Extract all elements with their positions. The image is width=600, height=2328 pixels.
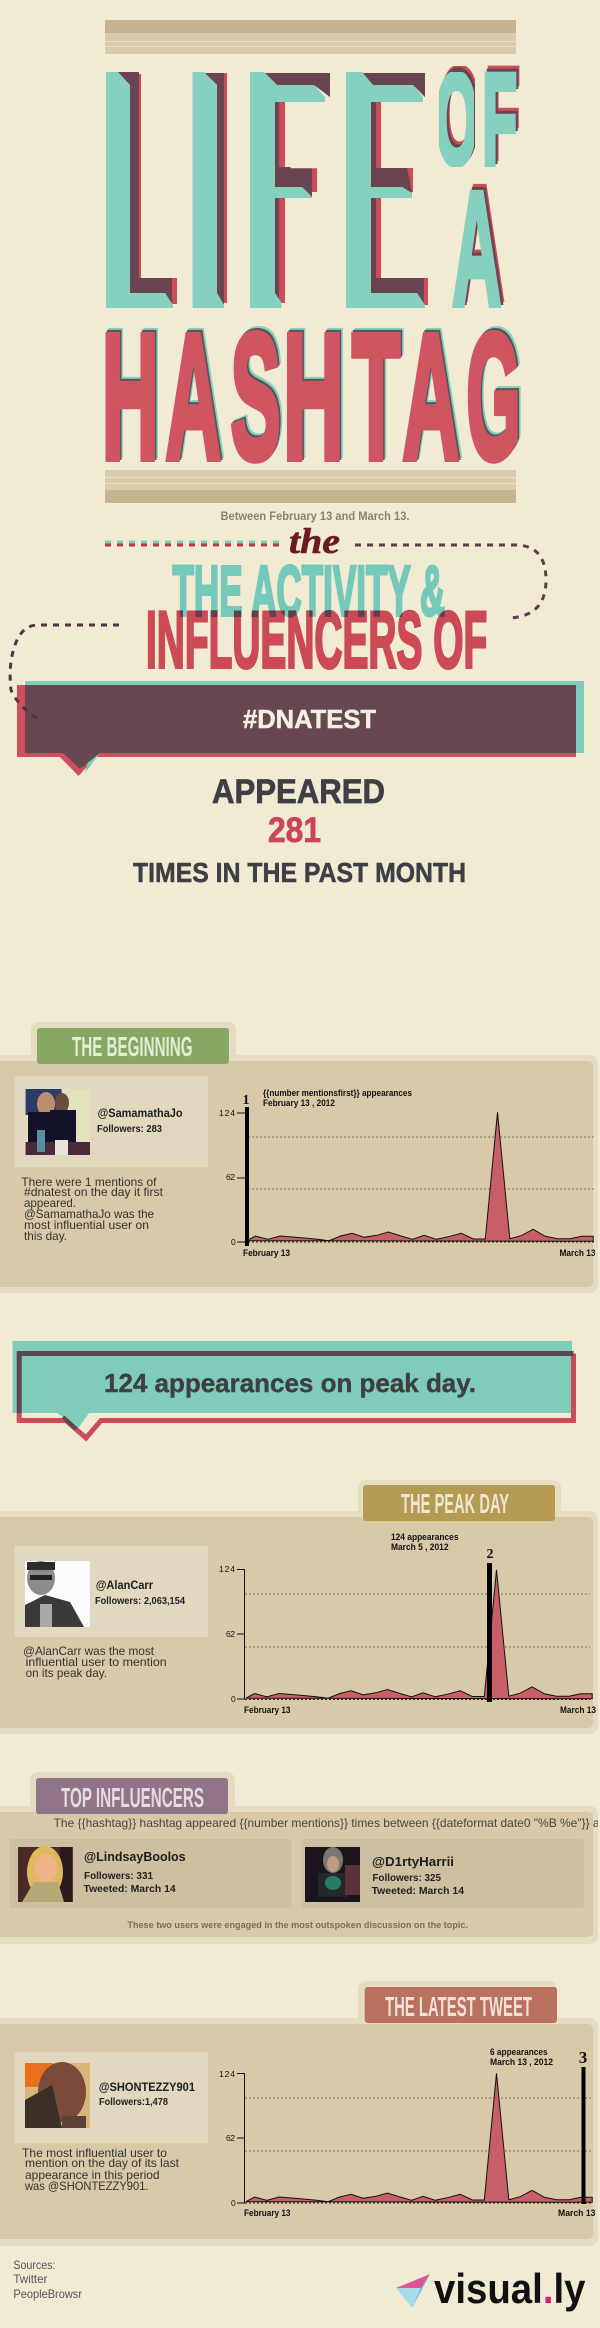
title word: LIFE: E [344,0,456,382]
chart: peak day: March 5 , 2012 [391,1542,448,1552]
user card: SamamathaJo: @SamamathaJo [98,1106,183,1120]
description: the beginning: most influential user on [24,1218,149,1232]
title word: HASHTAG: H [103,296,160,495]
title word: A: A [452,159,501,340]
description: the beginning: There were 1 mentions of [21,1175,157,1189]
title word: OF: O [438,42,481,187]
sources: Twitter [13,2272,47,2286]
tab: the beginning: THE BEGINNING [72,1031,192,1062]
photo: SHONTEZZY901 [25,2062,90,2128]
chart: latest tweet: February 13 [244,2208,290,2218]
panel: the peak day [0,1480,598,1734]
panel: top influencers [0,1772,600,1944]
title word: HASHTAG: A [166,297,221,497]
title word: HASHTAG: A [168,293,224,493]
chart: peak day: 124 [219,1564,235,1574]
chart: peak day: 0 [231,1694,236,1704]
overflowing template text: The {{hashtag}} hashtag appeared {{number mentions}} times between {{dateformat date0 "%B %e"}} a [54,1816,600,1830]
description: the latest tweet: The most influential user to [22,2146,167,2160]
panel: the latest tweet [0,1981,598,2246]
photo: SamamathaJo [26,1089,90,1155]
chart: first appearance: March 13 [560,1248,596,1258]
title word: HASHTAG: A [404,296,461,495]
title word: HASHTAG: H [102,298,159,497]
tab: top influencers: TOP INFLUENCERS [61,1782,204,1813]
headline stat [133,773,466,888]
dashed line: left [10,625,119,719]
top stripes [105,20,516,54]
panel: the beginning [0,1022,598,1293]
influencer card: LindsayBoolos: Tweeted: March 14 [84,1884,176,1895]
title: LIFE OF A HASHTAG [95,0,524,498]
title word: LIFE: I [181,0,228,382]
sources [13,2258,82,2301]
photo: AlanCarr [25,1561,90,1627]
user card: SHONTEZZY901 [14,2052,208,2143]
chart: first appearance [219,1088,596,1258]
title word: OF [439,66,520,167]
title word: HASHTAG: H [284,294,345,495]
chart: latest tweet: 6 appearances [490,2047,548,2057]
photo: D1rtyHarrii [305,1847,360,1902]
sources: PeopleBrowsr [13,2287,82,2301]
title word: LIFE: F [248,0,350,382]
chart: peak day: February 13 [244,1705,290,1715]
title word: A: A [455,153,504,334]
chart: first appearance: 124 [219,1108,235,1118]
heading: the activity and influencers of: THE ACTIVITY & [172,551,445,631]
title word: LIFE: F [239,0,341,382]
description: the beginning [21,1175,164,1243]
title word: OF: F [485,41,520,186]
user card: AlanCarr: @AlanCarr [96,1578,153,1592]
title word: HASHTAG: T [352,298,400,497]
callout text: 124 appearances on peak day. [104,1368,476,1398]
chart: first appearance: February 13 [243,1248,290,1258]
title word: OF: O [437,45,480,190]
title word: HASHTAG: H [283,296,344,497]
influencer card: D1rtyHarrii: Tweeted: March 14 [372,1886,464,1897]
description: the latest tweet: was @SHONTEZZY901. [24,2179,148,2193]
date range text: Between February 13 and March 13. [220,509,410,523]
title word: OF: F [484,44,519,189]
sources: Sources: [13,2258,55,2272]
user card: SamamathaJo: Followers: 283 [97,1124,162,1135]
photo: LindsayBoolos [18,1846,73,1902]
influencer card: D1rtyHarrii: @D1rtyHarrii [372,1854,454,1869]
title word: LIFE: L [107,0,209,382]
influencer card: LindsayBoolos: Followers: 331 [84,1871,153,1882]
description: the peak day: influential user to mention [26,1655,167,1669]
title word: HASHTAG: A [167,295,223,495]
title word: LIFE: I [190,0,237,382]
heading: the activity and influencers of [146,551,487,685]
title word: LIFE: L [95,0,197,382]
icon: visual.ly gem [396,2274,430,2308]
dashed line: top left [105,542,282,545]
influencer note: These two users were engaged in the most outspoken discussion on the topic. [127,1920,468,1930]
title word: HASHTAG [102,292,524,498]
chart: latest tweet: March 13 , 2012 [490,2057,553,2067]
heading: the activity and influencers of: INFLUENCERS OF [146,595,487,685]
tab: the peak day [363,1485,555,1521]
title word: OF: O [435,48,478,193]
description: the beginning: appeared. [24,1196,76,1210]
chart: first appearance: 1 [242,1093,250,1108]
word: the: the [289,521,340,561]
title word: HASHTAG: T [353,296,402,495]
user card: SamamathaJo [14,1076,208,1167]
user card: AlanCarr [14,1546,208,1637]
chart: latest tweet [219,2047,596,2218]
chart: first appearance: {{number mentionsfirst}} appearances [263,1088,412,1098]
logo: visual.ly: visual.ly [434,2265,586,2312]
title word: LIFE: F [248,0,350,382]
title word: HASHTAG: S [230,298,281,498]
chart: peak day [219,1532,596,1715]
title word: OF: F [482,47,517,192]
influencer card: D1rtyHarrii [302,1839,584,1908]
title word: LIFE: E [344,0,456,382]
user card: SHONTEZZY901: @SHONTEZZY901 [99,2080,195,2094]
chart: first appearance: 62 [226,1172,235,1182]
hashtag banner [17,681,584,776]
title word: LIFE: I [192,0,239,382]
bottom stripes [105,470,516,503]
callout: peak day appearances [13,1341,574,1438]
headline stat: 281 [268,811,321,850]
title word: HASHTAG: H [286,292,347,493]
user card: SHONTEZZY901: Followers:1,478 [99,2097,168,2108]
title word: A: A [454,156,503,337]
influencer card: D1rtyHarrii: Followers: 325 [372,1873,441,1884]
chart: peak day: 2 [486,1547,494,1562]
title word: HASHTAG: A [406,294,462,493]
headline stat: TIMES IN THE PAST MONTH [133,857,466,888]
hashtag text: #DNATEST [243,704,376,734]
chart: first appearance: February 13 , 2012 [263,1098,335,1108]
dashed line: top right [355,545,546,618]
influencer card: LindsayBoolos [10,1839,292,1908]
chart: latest tweet: 0 [231,2198,236,2208]
title word: HASHTAG: T [355,294,403,493]
title word: HASHTAG: G [468,294,522,495]
description: the latest tweet: mention on the day of its last [25,2156,180,2170]
chart: peak day: 62 [226,1629,235,1639]
chart: latest tweet: 3 [579,2048,587,2067]
title word: LIFE: E [335,0,447,382]
description: the peak day [23,1644,167,1680]
chart: peak day: 124 appearances [391,1532,458,1542]
chart: first appearance: 0 [231,1237,236,1247]
title word: LIFE: L [104,0,206,382]
headline stat: APPEARED [212,773,385,811]
description: the latest tweet [22,2146,180,2193]
description: the beginning: @SamamathaJo was the [24,1207,154,1221]
tab: the beginning [37,1028,229,1064]
title word: HASHTAG: H [105,294,162,493]
chart: latest tweet: 124 [219,2069,235,2079]
title word: HASHTAG: G [469,292,524,493]
title word: HASHTAG: S [232,296,282,496]
chart: peak day: March 13 [560,1705,596,1715]
title word: HASHTAG: G [466,296,521,497]
description: the beginning: #dnatest on the day it first [24,1185,164,1199]
description: the peak day: on its peak day. [26,1666,107,1680]
chart: latest tweet: 62 [226,2133,235,2143]
title word: LIFE [106,72,428,308]
description: the beginning: this day. [24,1229,67,1243]
description: the latest tweet: appearance in this period [25,2168,160,2182]
description: the peak day: @AlanCarr was the most [23,1644,155,1658]
tab: the latest tweet [365,1987,557,2023]
title word: HASHTAG: A [402,298,459,497]
tab: top influencers [36,1778,228,1814]
chart: latest tweet: March 13 [558,2208,596,2218]
user card: AlanCarr: Followers: 2,063,154 [95,1596,185,1607]
influencer card: LindsayBoolos: @LindsayBoolos [84,1849,186,1864]
title word: HASHTAG: S [234,294,284,494]
